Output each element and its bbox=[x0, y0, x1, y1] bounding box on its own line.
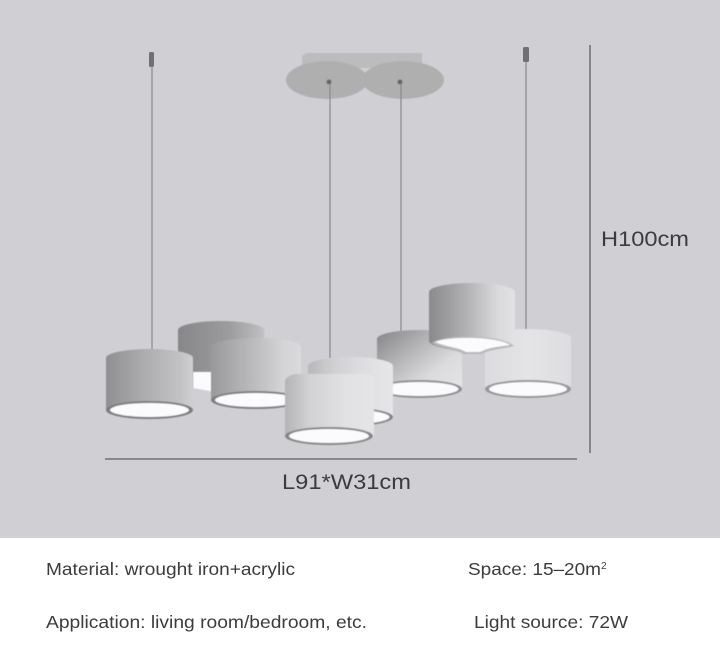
label: length and width: L91*W31cm bbox=[282, 470, 411, 494]
dimension line: height bbox=[589, 45, 591, 453]
right suspension clip bbox=[523, 47, 529, 62]
lamp: far right bbox=[485, 329, 571, 398]
spec: application: Application: living room/bedroom, etc. bbox=[46, 612, 367, 632]
spec: light source: Light source: 72W bbox=[474, 612, 629, 632]
lamp: top right bbox=[429, 283, 515, 354]
ceiling mount bbox=[286, 53, 444, 99]
lamp: center left bbox=[211, 338, 301, 409]
left suspension clip bbox=[149, 52, 154, 67]
spec: space: Space: 15–20m bbox=[468, 559, 601, 579]
spec: material: Material: wrought iron+acrylic bbox=[46, 559, 295, 579]
lamp: back left bbox=[178, 321, 264, 392]
lamp: back center bbox=[308, 357, 393, 426]
suspension rods bbox=[152, 62, 526, 358]
label: height: H100cm bbox=[601, 227, 689, 251]
spec: space: 2 bbox=[601, 561, 607, 572]
lamp: front center bbox=[285, 374, 374, 445]
lamp: far left bbox=[106, 349, 193, 419]
lamp: right center bbox=[377, 330, 462, 398]
dimension line: width bbox=[105, 458, 577, 460]
